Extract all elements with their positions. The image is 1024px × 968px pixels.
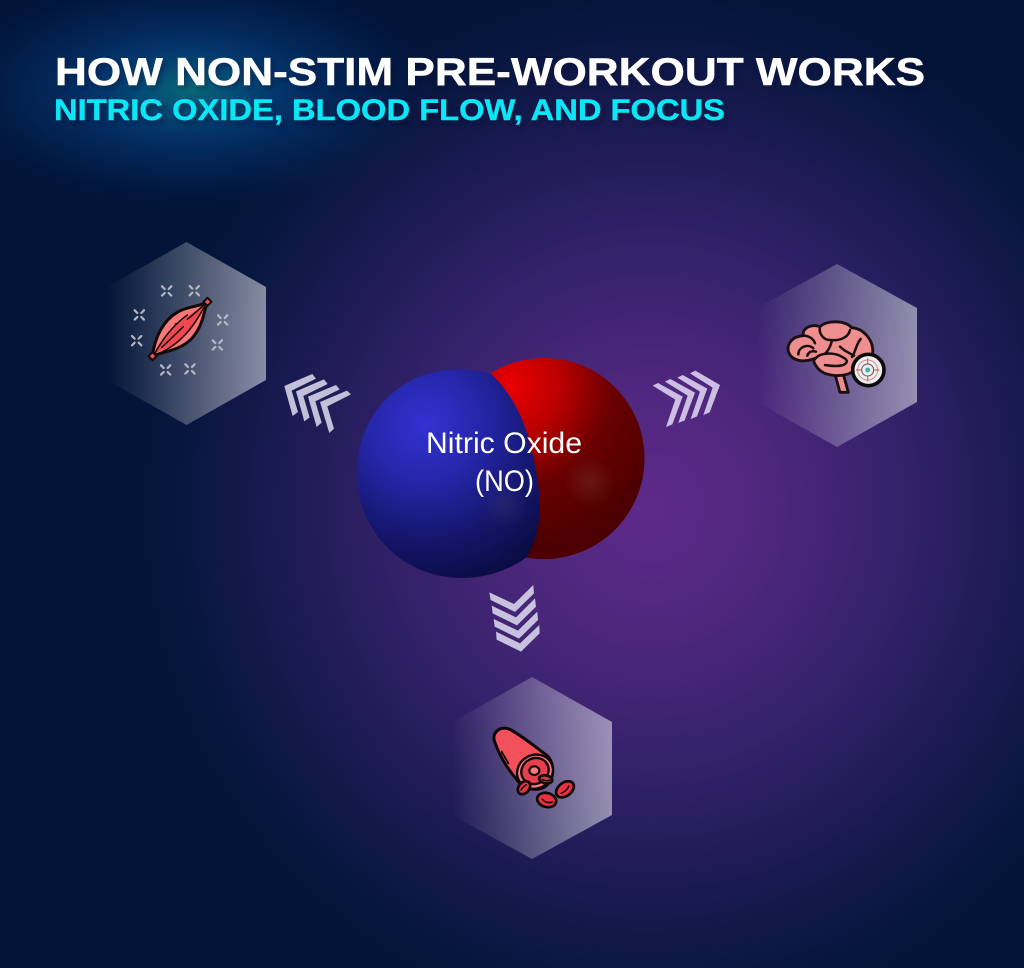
molecule label: Nitric Oxide [426, 427, 582, 460]
heading: HOW NON-STIM PRE-WORKOUT WORKS [55, 51, 925, 94]
panel: brain hexagon [757, 264, 917, 447]
oxygen sphere [444, 358, 644, 559]
panel: blood vessel hexagon [452, 677, 612, 859]
icon: brain [788, 322, 873, 392]
subheading: NITRIC OXIDE, BLOOD FLOW, AND FOCUS [54, 94, 725, 127]
icon: muscle [148, 298, 211, 360]
icon: blood vessel and cells [494, 728, 577, 809]
icon: sparks around muscle [132, 286, 227, 375]
heading: HOW NON-STIM PRE-WORKOUT WORKS [58, 54, 928, 97]
molecule label: (NO) [475, 465, 534, 498]
nitrogen sphere [357, 369, 540, 578]
arrow: towards muscle [284, 374, 351, 433]
arrow: towards brain [653, 371, 720, 427]
molecule label [426, 427, 582, 498]
icon: focus target [853, 354, 884, 386]
arrow: towards blood vessel [489, 585, 540, 652]
subheading: NITRIC OXIDE, BLOOD FLOW, AND FOCUS [57, 98, 728, 131]
panel: muscle hexagon [107, 242, 266, 425]
title block [54, 51, 928, 131]
nitric oxide molecule [357, 358, 644, 578]
